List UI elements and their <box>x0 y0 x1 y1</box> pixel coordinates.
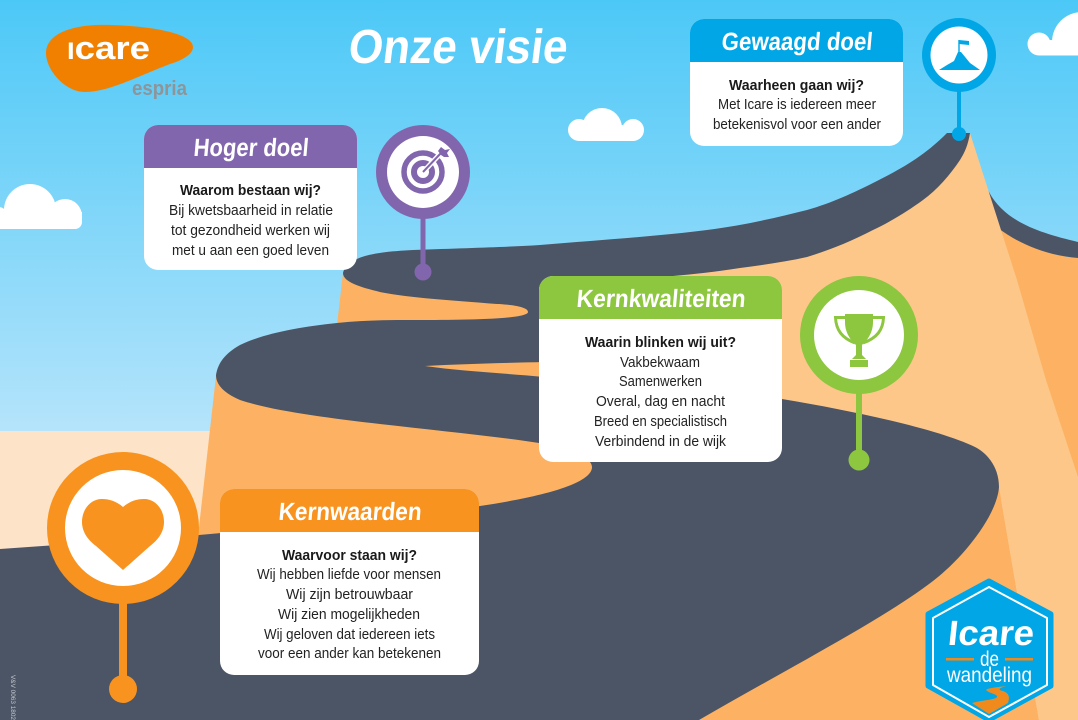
road: winding path <box>0 133 999 720</box>
icon: trophy <box>836 314 884 367</box>
text block <box>169 183 333 259</box>
text block: Vakbekwaam <box>620 355 700 371</box>
text block: Waarom bestaan wij? <box>180 183 321 199</box>
icon: mountain with flag <box>939 40 980 70</box>
text block: Bij kwetsbaarheid in relatie <box>169 203 333 219</box>
text block: met u aan een goed leven <box>172 243 329 259</box>
mountain: lower right slope <box>640 487 1039 720</box>
text block: Wij zien mogelijkheden <box>278 607 420 623</box>
pin: Gewaagd doel <box>922 18 996 141</box>
text block: Wij geloven dat iedereen iets <box>264 627 435 643</box>
cloud: left <box>0 184 82 229</box>
badge hexagon <box>928 581 1051 720</box>
heading: Hoger doel <box>192 134 310 162</box>
card header <box>144 125 357 168</box>
text block: Waarheen gaan wij? <box>729 78 864 94</box>
heading: Kernwaarden <box>277 498 423 526</box>
heading: Gewaagd doel <box>720 28 874 56</box>
logo word: Icare <box>67 30 150 66</box>
mountain: far right slope <box>995 222 1078 500</box>
mountain: sunlit face <box>640 133 1078 720</box>
mountain: left slopes <box>197 273 600 545</box>
title: Onze visie <box>346 20 571 74</box>
badge dashes <box>946 658 1033 660</box>
cloud: centre <box>568 108 644 141</box>
badge small word: de <box>980 648 999 671</box>
text block: Verbindend in de wijk <box>595 434 727 450</box>
pin: Kernkwaliteiten <box>800 276 918 470</box>
text block: betekenisvol voor een ander <box>713 117 881 133</box>
text block: Samenwerken <box>619 374 702 390</box>
text block: Waarvoor staan wij? <box>282 548 417 564</box>
badge: Icare de wandeling <box>928 581 1051 720</box>
badge subtitle: wandeling <box>946 664 1032 687</box>
text block: tot gezondheid werken wij <box>171 223 330 239</box>
badge word: Icare <box>946 614 1036 653</box>
panel: Hoger doel <box>144 125 357 270</box>
text block: Wij hebben liefde voor mensen <box>257 567 441 583</box>
panel: Kernwaarden <box>220 489 479 675</box>
logo subword: espria <box>132 78 188 100</box>
logo: Icare espria <box>46 25 193 100</box>
background: sky <box>0 0 1078 432</box>
icon: heart <box>82 499 164 570</box>
background: sand <box>0 431 1078 720</box>
road: far side of the peak <box>985 185 1078 258</box>
text block: voor een ander kan betekenen <box>258 646 441 662</box>
panel: Gewaagd doel <box>690 19 903 146</box>
text block: Met Icare is iedereen meer <box>718 97 876 113</box>
text block: Waarin blinken wij uit? <box>585 335 736 351</box>
text block <box>257 548 441 662</box>
badge inner outline <box>933 587 1047 717</box>
cloud: top right <box>1028 12 1078 56</box>
text block: Breed en specialistisch <box>594 414 727 430</box>
text block <box>585 335 736 450</box>
mountain: sliver inside road <box>425 362 545 377</box>
icon: target with arrow <box>404 147 450 191</box>
pin: Kernwaarden <box>47 452 199 703</box>
card header <box>690 19 903 62</box>
logo blob <box>46 25 193 92</box>
badge road <box>972 686 1009 714</box>
text block: Overal, dag en nacht <box>596 394 725 410</box>
card body <box>220 489 479 675</box>
text block: Wij zijn betrouwbaar <box>286 587 413 603</box>
card body <box>144 125 357 270</box>
card body <box>690 19 903 146</box>
panel: Kernkwaliteiten <box>539 276 782 462</box>
card header <box>220 489 479 532</box>
pin: Hoger doel <box>376 125 470 280</box>
text block <box>713 78 881 133</box>
heading: Kernkwaliteiten <box>575 285 747 313</box>
card header <box>539 276 782 319</box>
card body <box>539 276 782 462</box>
footer code: V&V 0063 1802 <box>9 675 16 720</box>
